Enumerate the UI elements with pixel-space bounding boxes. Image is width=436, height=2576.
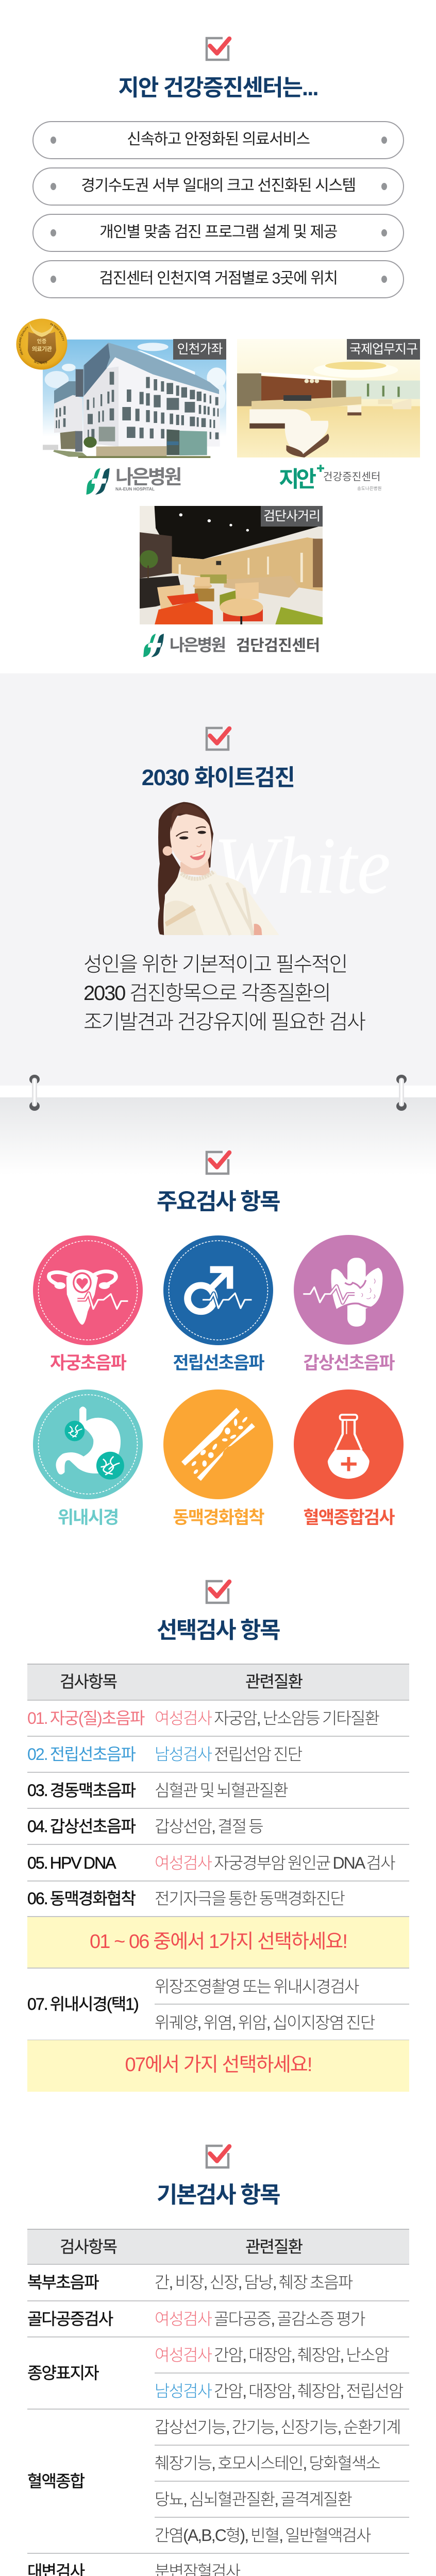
- location tag: international business district: [347, 339, 420, 360]
- callout: choose one of 01-06: [27, 1917, 409, 1969]
- row 02: 남성검사 전립선암 진단: [155, 1745, 301, 1764]
- icon: uterus ultrasound: [33, 1235, 143, 1345]
- location tag: Incheon Gajwa: [173, 339, 226, 360]
- row 07: 07. 위내시경(택1): [27, 1995, 138, 2013]
- icon: section 2 checkbox: [205, 726, 232, 751]
- title: main exam items: 주요검사 항목: [157, 1189, 279, 1214]
- callout: choose from 07: 07에서 가지 선택하세요!: [125, 2054, 311, 2076]
- decorative gradient band: [0, 1097, 436, 1175]
- label: thyroid ultrasound: 갑상선초음파: [303, 1353, 394, 1373]
- row: blood panel: 혈액종합: [27, 2472, 84, 2490]
- icon: right binder ring: [396, 1075, 407, 1111]
- table: basic exams: [27, 2229, 409, 2576]
- row: abdominal ultrasound: 복부초음파: [27, 2273, 98, 2292]
- row: abdominal ultrasound: [27, 2273, 353, 2292]
- callout: choose one of 01-06: 01 ~ 06 중에서 1가지 선택하세요!: [90, 1931, 347, 1953]
- location tag: Incheon Gajwa: 인천가좌: [177, 342, 223, 357]
- label: gastroscopy: 위내시경: [58, 1508, 118, 1528]
- row: tumor markers: 여성검사 간암, 대장암, 췌장암, 난소암: [155, 2346, 389, 2364]
- row: blood panel: 췌장기능, 호모시스테인, 당화혈색소: [155, 2454, 380, 2472]
- row 06: 06. 동맥경화협착: [27, 1889, 135, 1908]
- text: checkup description: [83, 953, 365, 1033]
- label: uterus ultrasound: 자궁초음파: [50, 1353, 126, 1373]
- text: checkup description: 2030 검진항목으로 각종질환의: [83, 982, 330, 1005]
- row: stool test: [27, 2562, 240, 2576]
- icon: gold accreditation badge: PATIENT SAFETY: [50, 323, 64, 341]
- row 07: [27, 1977, 375, 2032]
- feature item 2: [32, 167, 404, 206]
- row 07: 위궤양, 위염, 위암, 십이지장염 진단: [155, 2013, 374, 2032]
- row 01: [27, 1709, 379, 1727]
- row 02: 02. 전립선초음파: [27, 1745, 135, 1764]
- icon: arteriosclerosis: [163, 1389, 273, 1499]
- label: prostate ultrasound: 전립선초음파: [173, 1353, 264, 1373]
- photo: Geomdan intersection waiting lounge: [140, 506, 323, 624]
- photo: smiling woman: [158, 802, 279, 936]
- icon: prostate ultrasound: [163, 1235, 273, 1345]
- row 04: 04. 갑상선초음파: [27, 1817, 135, 1836]
- logo: Na-Eun Hospital Geomdan center: [143, 634, 320, 657]
- icon: gold accreditation badge: HEALTHCARE QUALITY: [19, 326, 28, 355]
- table header: [27, 1664, 409, 1701]
- row 06: [27, 1889, 345, 1908]
- icon: left binder ring: [29, 1075, 40, 1111]
- panel: 2030 white checkup background: [0, 673, 436, 1086]
- text: checkup description: 조기발견과 건강유지에 필요한 검사: [83, 1011, 365, 1033]
- icon: blood test flask: [294, 1389, 404, 1499]
- icon: gold accreditation badge: 의료기관: [32, 345, 52, 352]
- logo: Jian health center: 지안: [279, 467, 313, 492]
- icon: gastroscopy: [33, 1389, 143, 1499]
- row: tumor markers: 남성검사 간암, 대장암, 췌장암, 전립선암: [155, 2382, 403, 2400]
- table header: 관련질환: [245, 1672, 302, 1691]
- photo: Incheon Gajwa hospital building: [43, 340, 226, 458]
- table header: 관련질환: [245, 2238, 302, 2256]
- row 06: 전기자극을 통한 동맥경화진단: [155, 1889, 344, 1908]
- row: bone density: 골다공증검사: [27, 2310, 112, 2328]
- feature item 1: 신속하고 안정화된 의료서비스: [127, 131, 310, 148]
- logo: Na-Eun Hospital: NA-EUN HOSPITAL: [115, 486, 155, 492]
- title: basic exam items: 기본검사 항목: [157, 2182, 279, 2208]
- logo: Jian health center: [279, 465, 382, 492]
- table: optional exams: [27, 1664, 409, 2092]
- row: bone density: [27, 2310, 365, 2328]
- icon: section 3 checkbox: [205, 1150, 232, 1175]
- title: 2030 white checkup: 2030 화이트검진: [142, 765, 294, 790]
- icon: section 4 checkbox: [205, 1580, 232, 1604]
- feature item 1: [32, 121, 404, 159]
- feature item 2: 경기수도권 서부 일대의 크고 선진화된 시스템: [81, 177, 356, 194]
- row 05: 05. HPV DNA: [27, 1854, 115, 1872]
- icon: gold accreditation badge: 보건복지부: [34, 360, 47, 364]
- row 03: 03. 경동맥초음파: [27, 1781, 135, 1800]
- row 03: 심혈관 및 뇌혈관질환: [155, 1781, 288, 1800]
- title: health center intro: 지안 건강증진센터는...: [118, 75, 318, 100]
- row 03: [27, 1781, 288, 1800]
- icon: thyroid ultrasound: [294, 1235, 404, 1345]
- row: bone density: 여성검사 골다공증, 골감소증 평가: [155, 2310, 365, 2328]
- feature item 3: 개인별 맞춤 검진 프로그램 설계 및 제공: [99, 224, 337, 241]
- row: abdominal ultrasound: 간, 비장, 신장, 담낭, 췌장 초음파: [155, 2273, 352, 2292]
- icon: section 1 checkbox: [205, 36, 232, 61]
- logo: Jian health center: 송도나은병원: [357, 486, 382, 491]
- label: arteriosclerosis: 동맥경화협착: [173, 1508, 264, 1528]
- label: blood test: 혈액종합검사: [303, 1508, 394, 1528]
- row 05: [27, 1854, 395, 1872]
- photo: international business district lobby: [237, 339, 420, 457]
- feature item 4: [32, 260, 404, 298]
- row: blood panel: 갑상선기능, 간기능, 신장기능, 순환기계: [155, 2418, 400, 2436]
- logo: Na-Eun Hospital Geomdan center: 검단검진센터: [236, 637, 320, 654]
- row: tumor markers: 종양표지자: [27, 2364, 98, 2382]
- location tag: Geomdan intersection: [261, 506, 323, 527]
- row 04: [27, 1817, 263, 1836]
- icon: section 5 checkbox: [205, 2144, 232, 2169]
- location tag: Geomdan intersection: 검단사거리: [263, 509, 320, 523]
- icon: gold accreditation badge: 인증: [37, 338, 46, 345]
- row 02: [27, 1745, 302, 1764]
- row: blood panel: [27, 2418, 400, 2545]
- icon: gold accreditation badge: [16, 318, 67, 370]
- logo: Na-Eun Hospital Geomdan center: 나은병원: [170, 636, 225, 654]
- row 01: 01. 자궁(질)초음파: [27, 1709, 144, 1727]
- table header: 검사항목: [60, 1672, 116, 1691]
- callout: choose from 07: [27, 2040, 409, 2092]
- logo: Jian health center: 건강증진센터: [323, 471, 381, 483]
- table header: [27, 2229, 409, 2265]
- feature item 4: 검진센터 인천지역 거점별로 3곳에 위치: [99, 270, 338, 287]
- row 04: 갑상선암, 결절 등: [155, 1817, 263, 1836]
- logo: Na-Eun Hospital: 나은병원: [115, 467, 180, 488]
- row 05: 여성검사 자궁경부암 원인균 DNA 검사: [155, 1854, 395, 1872]
- logo: Na-Eun Hospital: [86, 467, 180, 495]
- row 07: 위장조영촬영 또는 위내시경검사: [155, 1977, 359, 1996]
- row 01: 여성검사 자궁암, 난소암등 기타질환: [155, 1709, 379, 1727]
- location tag: international business district: 국제업무지구: [349, 342, 417, 357]
- title: optional exam items: 선택검사 항목: [157, 1618, 279, 1643]
- table header: 검사항목: [60, 2238, 116, 2256]
- panel: feature list: [32, 121, 404, 298]
- row: blood panel: 간염(A,B,C형), 빈혈, 일반혈액검사: [155, 2526, 370, 2545]
- row: tumor markers: [27, 2346, 403, 2400]
- text: checkup description: 성인을 위한 기본적이고 필수적인: [83, 953, 347, 976]
- row: blood panel: 당뇨, 심뇌혈관질환, 골격계질환: [155, 2490, 351, 2509]
- feature item 3: [32, 214, 404, 252]
